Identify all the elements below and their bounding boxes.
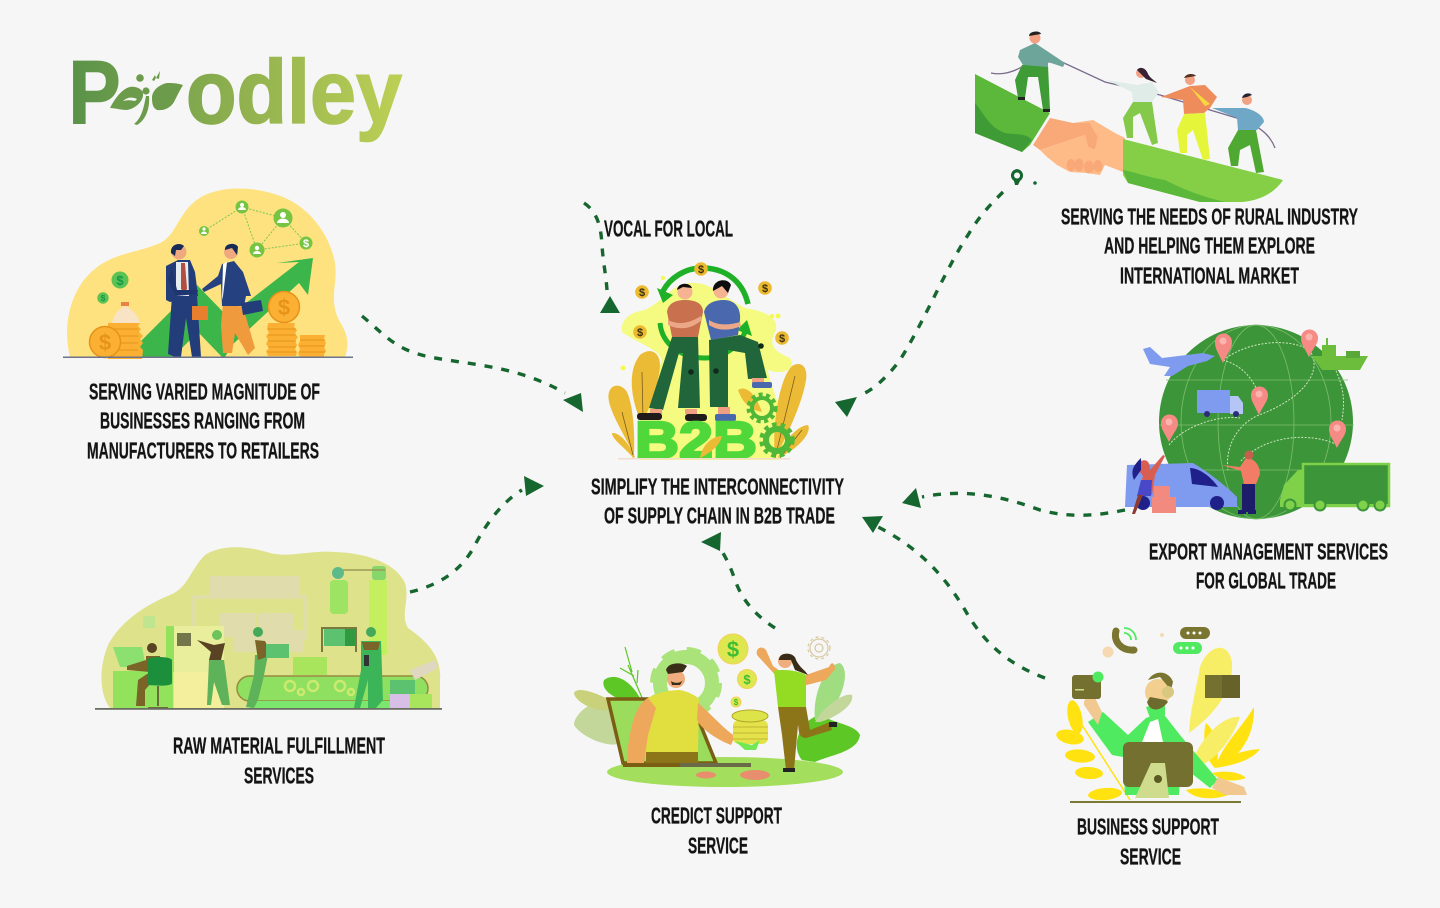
small front plant <box>700 436 722 458</box>
plane <box>1143 347 1215 376</box>
worker at panel <box>197 630 230 705</box>
illustration: handshake with team on rope <box>975 32 1283 202</box>
leaves <box>574 647 860 762</box>
businessman left <box>166 244 208 357</box>
person four <box>1212 93 1264 173</box>
conveyor <box>237 676 428 701</box>
illustration: credit support: $ <box>734 698 739 707</box>
left sleeve <box>975 74 1050 152</box>
label: credit support: CREDICT SUPPORT <box>651 802 782 828</box>
arrow: rural industry to centre <box>835 169 1037 417</box>
hands <box>1033 118 1125 175</box>
label: export management: FOR GLOBAL TRADE <box>1196 567 1336 593</box>
man in laptop <box>627 663 735 763</box>
rope <box>991 62 1275 148</box>
dotted routes <box>1169 343 1344 470</box>
arrow: credit support to centre <box>701 532 775 628</box>
woman <box>757 648 837 772</box>
ground line <box>63 356 353 358</box>
boxes on belt <box>293 657 327 675</box>
logo: Poodley: P <box>68 43 120 143</box>
stars <box>620 276 780 370</box>
person two <box>1107 68 1159 145</box>
B2B letters: B2B <box>635 412 757 470</box>
ground line <box>95 708 442 710</box>
worker with box <box>246 627 289 708</box>
label: credit support <box>651 802 782 858</box>
green truck <box>1280 464 1389 510</box>
coins in hand <box>732 710 768 750</box>
illustration: credit support: $ <box>743 672 751 687</box>
chat bubbles <box>1173 627 1210 654</box>
woman at van <box>1132 455 1165 514</box>
illustration: business support agent <box>1055 627 1260 803</box>
person one <box>1015 32 1065 112</box>
label: varied magnitude: SERVING VARIED MAGNITUDE OF <box>89 378 320 404</box>
arrow: businesses to centre <box>362 316 583 412</box>
outline gear <box>808 637 830 659</box>
illustration: business handshake and growth: $ <box>99 330 111 355</box>
label: central message: OF SUPPLY CHAIN IN B2B TRADE <box>604 502 835 528</box>
agent body <box>1084 673 1247 795</box>
man right <box>688 280 772 421</box>
label: raw material: SERVICES <box>244 762 314 788</box>
illustration: central B2B pair: $ <box>639 287 645 299</box>
label: raw material <box>173 732 385 788</box>
label: central message <box>591 473 844 528</box>
label: business support: BUSINESS SUPPORT <box>1077 813 1219 839</box>
illustration: global trade globe <box>1125 325 1389 519</box>
logo: Poodley <box>68 43 402 143</box>
illustration: central B2B pair <box>608 262 809 470</box>
label: rural industry <box>1061 203 1358 288</box>
arrow: export services to centre <box>902 488 1125 515</box>
label: business support: SERVICE <box>1120 843 1181 869</box>
arrow: business support to centre <box>862 516 1045 678</box>
logo: Poodley: odley <box>186 43 402 143</box>
card <box>1072 672 1104 699</box>
businessman right <box>202 244 263 355</box>
yellow blob <box>622 283 792 460</box>
pin marker <box>1011 169 1023 185</box>
gear <box>653 650 719 716</box>
label: rural industry: INTERNATIONAL MARKET <box>1120 262 1299 288</box>
base ellipse <box>607 757 843 787</box>
label: rural industry: AND HELPING THEM EXPLORE <box>1104 232 1315 258</box>
growth arrow <box>137 258 313 357</box>
man pointing <box>1222 450 1260 514</box>
illustration: credit support <box>574 634 860 787</box>
person three <box>1161 74 1217 160</box>
dollar coins <box>633 262 789 345</box>
dropped coins <box>696 770 770 780</box>
illustration: business handshake and growth: $ <box>101 293 106 303</box>
green dollar coins <box>112 272 128 288</box>
label: varied magnitude: MANUFACTURERS TO RETAILERS <box>87 437 319 463</box>
location pins <box>1161 330 1346 448</box>
label: vocal for local: VOCAL FOR LOCAL <box>604 215 733 241</box>
illustration: business handshake and growth: $ <box>116 273 124 288</box>
right sleeve <box>1123 139 1283 202</box>
desk and worker <box>113 643 173 709</box>
illustration: business handshake and growth: $ <box>303 238 309 250</box>
illustration: central B2B pair: $ <box>637 327 643 339</box>
circular arrow <box>663 268 748 304</box>
illustration: credit support: $ <box>727 637 739 662</box>
illustration: central B2B pair: $ <box>779 333 785 345</box>
label: business support <box>1077 813 1219 869</box>
floating coins <box>718 634 756 707</box>
shelves and boxes <box>210 576 304 652</box>
label: varied magnitude: BUSINESSES RANGING FROM <box>100 407 305 433</box>
blue van <box>1125 463 1237 510</box>
illustration: central B2B pair: $ <box>762 283 768 295</box>
plants <box>608 351 809 458</box>
label: raw material: RAW MATERIAL FULFILLMENT <box>173 732 385 758</box>
desk line <box>1070 801 1241 803</box>
label: export management <box>1149 538 1388 593</box>
illustration: business handshake and growth: $ <box>278 295 290 320</box>
control panel <box>166 626 224 709</box>
blue truck <box>1197 390 1243 417</box>
laptop <box>608 699 716 763</box>
gold coins <box>108 323 326 359</box>
label: credit support: SERVICE <box>688 832 748 858</box>
ship <box>1312 338 1368 370</box>
phone with signal <box>1115 628 1136 650</box>
boxes <box>1152 486 1176 513</box>
man left <box>637 284 707 421</box>
illustration: business handshake and growth <box>63 188 353 359</box>
illustration: central B2B pair: $ <box>698 264 704 276</box>
label: varied magnitude <box>87 378 320 463</box>
gears <box>748 394 792 456</box>
monitor <box>1123 742 1193 798</box>
network nodes <box>204 207 306 250</box>
illustration: raw material factory <box>95 547 442 710</box>
label: central message: SIMPLIFY THE INTERCONNECTIVITY <box>591 473 844 499</box>
worker with tablet <box>354 627 383 708</box>
robot arm <box>322 566 387 655</box>
arrow: raw material to centre <box>410 476 544 592</box>
yellow speech shape <box>1189 648 1232 733</box>
book <box>1205 675 1240 698</box>
arrow: vocal for local to centre <box>584 203 620 313</box>
yellow leaves <box>1055 699 1260 801</box>
icon: leaf sprout <box>110 71 183 125</box>
